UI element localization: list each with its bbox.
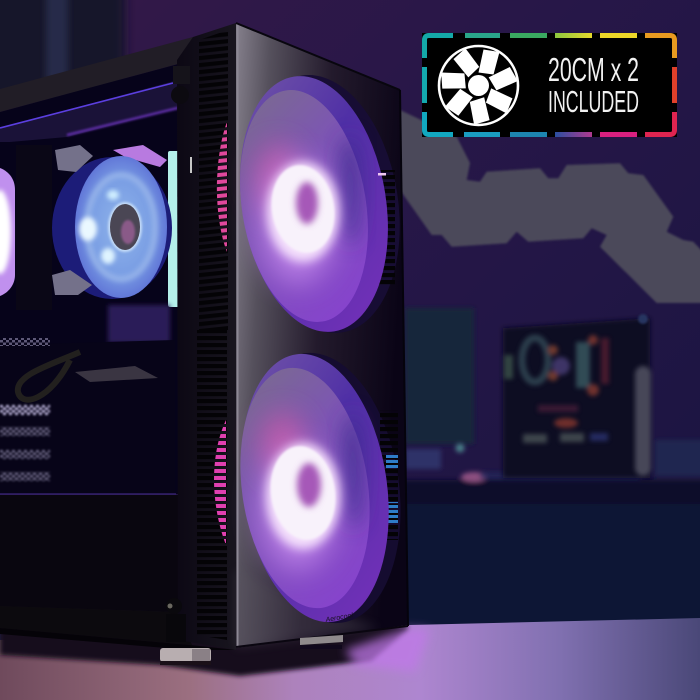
fan ring [225,344,405,632]
case pillar with vents [166,23,236,650]
bottom frame [0,606,192,645]
fan outer frame [229,343,417,633]
badge text [548,51,639,119]
fan disc [224,81,384,331]
blue vent glow [386,453,398,524]
bottom fan [225,343,417,633]
glass right edge [400,90,408,626]
right rear foot [300,635,343,649]
brand logo: Aerocool [324,612,354,624]
blue shade [341,412,365,528]
cooler tower [16,145,52,310]
upper pink fan glow [217,122,227,252]
fan mount clips [52,145,93,295]
table surface [0,618,700,700]
hub center [296,182,318,224]
GPU top [0,340,175,494]
graphics card plate [75,366,158,382]
PSU shroud [0,495,178,612]
lower vent slots [197,330,227,640]
central glow [267,162,339,262]
wide glow [260,160,336,284]
purple light glow on table [345,628,430,672]
upper vent slots [199,30,228,330]
radiator bright bar [168,151,179,307]
purple light line [67,108,178,135]
lower pink fan glow [214,420,226,545]
lower bracket [0,628,236,650]
CPU fan [52,156,172,299]
case shadow on table [0,600,408,676]
blue shade [338,135,362,245]
fan disc [226,359,384,617]
right vent slots [377,170,395,285]
badge text: INCLUDED [548,85,639,119]
left front foot [160,648,211,665]
background PC case with LEDs [503,314,651,478]
right vent slots [380,410,398,540]
fan outer frame [227,64,417,344]
pink glow [261,413,305,477]
top fan [223,64,417,344]
white hub [265,161,341,257]
central glow [266,443,340,549]
wide glow [260,446,336,570]
background desk items [400,440,700,629]
heatsink top [113,145,167,167]
badge text: 20CM x 2 [548,51,639,88]
motherboard block [108,305,170,343]
checker cable strip [0,338,50,346]
icon: fan [439,46,520,127]
glass bottom edge [236,626,408,647]
background gray hexagon wall lights [400,110,700,303]
glass front panel [236,23,408,648]
blue light line [0,83,173,128]
side top frame [0,37,193,112]
cable loop [18,352,80,400]
background monitor [405,308,474,444]
expansion slot strips [0,405,50,481]
case side panel [0,37,236,650]
badge [422,33,677,137]
pink glow [256,144,300,216]
LED reflections [378,173,386,176]
top mesh [0,80,178,142]
rainbow dashed border [424,33,674,137]
white indicator [190,157,192,173]
top bracket [173,66,190,84]
left glowing fan edge [0,168,15,296]
bottom lock [166,598,186,642]
hub center [297,463,321,507]
shroud edge light [0,493,176,495]
top power button [171,86,189,104]
window interior [0,60,193,494]
fan ring [223,65,405,343]
white hub [265,442,341,544]
glass top edge [236,23,400,90]
